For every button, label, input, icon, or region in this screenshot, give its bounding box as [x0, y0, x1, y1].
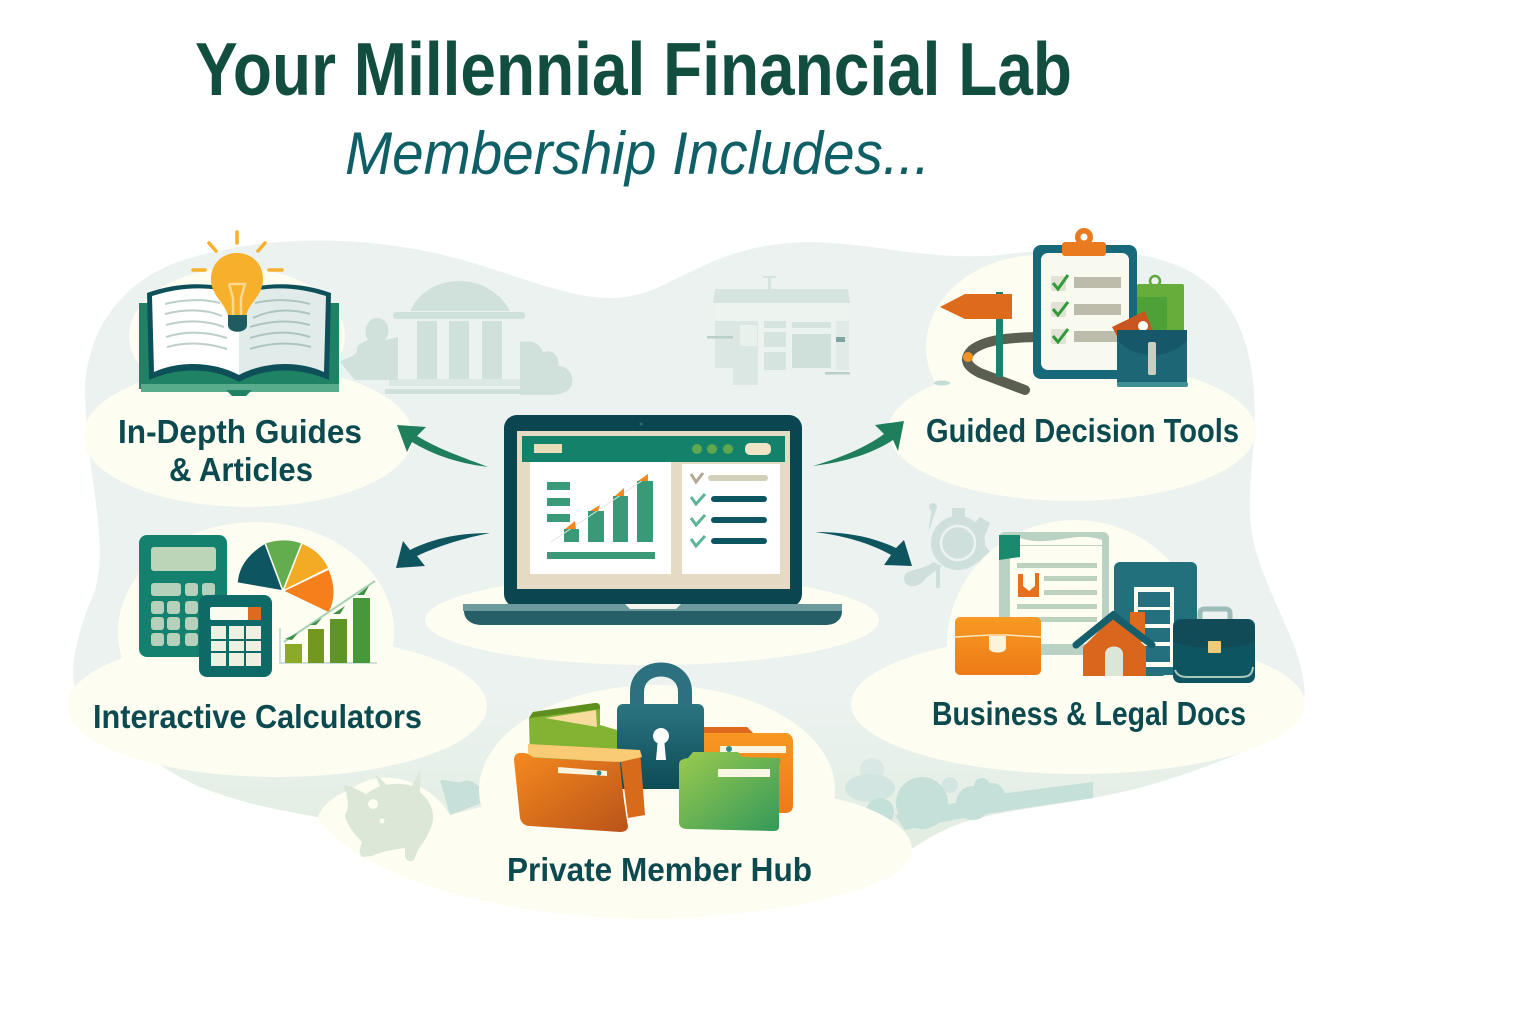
laptop dashboard [463, 415, 842, 625]
ellipse: decision tools backing [926, 255, 1154, 439]
subtitle: Membership Includes... [345, 120, 930, 187]
ghost: storefront building [707, 276, 850, 385]
icon: open book with lightbulb [139, 232, 339, 396]
ghost: gear and key [904, 503, 992, 588]
orange front folder [620, 750, 645, 818]
signpost [996, 292, 1003, 377]
ghost: clouds and skyline [845, 758, 1093, 830]
label: In-Depth Guides & Articles: & Articles [169, 451, 313, 488]
briefcase [1200, 609, 1230, 629]
label: In-Depth Guides & Articles [118, 413, 362, 488]
bag [1117, 336, 1187, 383]
icon: padlock and folders [514, 670, 793, 832]
green front folder [679, 752, 781, 831]
icon: clipboard checklist, signpost and bag [940, 228, 1188, 390]
tag [1112, 311, 1155, 336]
arrow: to calculators [396, 533, 490, 568]
spot: faint mark [934, 380, 950, 386]
arrow: to guides [397, 425, 488, 467]
winding road [967, 337, 1035, 390]
ghost: piggy bank [343, 771, 433, 861]
ellipse: book backing [129, 268, 345, 404]
orange folder [955, 617, 1041, 675]
ellipse: docs label [851, 634, 1305, 774]
arrow: to decision tools [813, 421, 904, 466]
orange back folder [704, 727, 793, 813]
background blob [73, 241, 1305, 860]
green back folder [529, 703, 617, 760]
ledger [1114, 562, 1197, 675]
label: Private Member Hub: Private Member Hub [507, 851, 812, 888]
title: Your Millennial Financial Lab [195, 27, 1072, 111]
small calculator [199, 595, 272, 677]
ellipse: guides label [83, 365, 413, 507]
label: Interactive Calculators: Interactive Calculators [93, 698, 422, 735]
arrow: to business docs [815, 532, 912, 566]
title [195, 27, 1072, 187]
document [999, 532, 1109, 655]
ellipse: docs backing [947, 520, 1203, 770]
shape: hub label area [318, 760, 912, 919]
clipboard [1033, 245, 1137, 379]
label: Guided Decision Tools: Guided Decision Tools [926, 412, 1239, 449]
ellipse: calculators backing [118, 522, 394, 742]
icon: legal documents, folder, house and briefcase [955, 532, 1255, 683]
padlock [637, 670, 685, 710]
dashboard header [522, 436, 785, 462]
ellipse: hub backing [479, 685, 835, 895]
checklist [691, 473, 768, 546]
green folder [1150, 276, 1160, 286]
house [1130, 612, 1145, 642]
bar chart [547, 474, 655, 559]
ellipse: decision tools label [888, 361, 1256, 501]
pie chart [237, 540, 334, 613]
growth bars [280, 581, 377, 663]
ellipse: laptop shadow [425, 575, 879, 665]
lightbulb [193, 232, 282, 332]
ghost: bank building [340, 281, 572, 395]
laptop base [463, 604, 842, 625]
ghost: small tree [440, 780, 492, 815]
icon: calculators, pie chart and bars [139, 535, 377, 677]
label: In-Depth Guides & Articles: In-Depth Guides [118, 413, 362, 450]
large calculator [139, 535, 227, 657]
label: Business & Legal Docs: Business & Legal Docs [932, 695, 1246, 732]
ellipse: calculators label [67, 635, 487, 777]
